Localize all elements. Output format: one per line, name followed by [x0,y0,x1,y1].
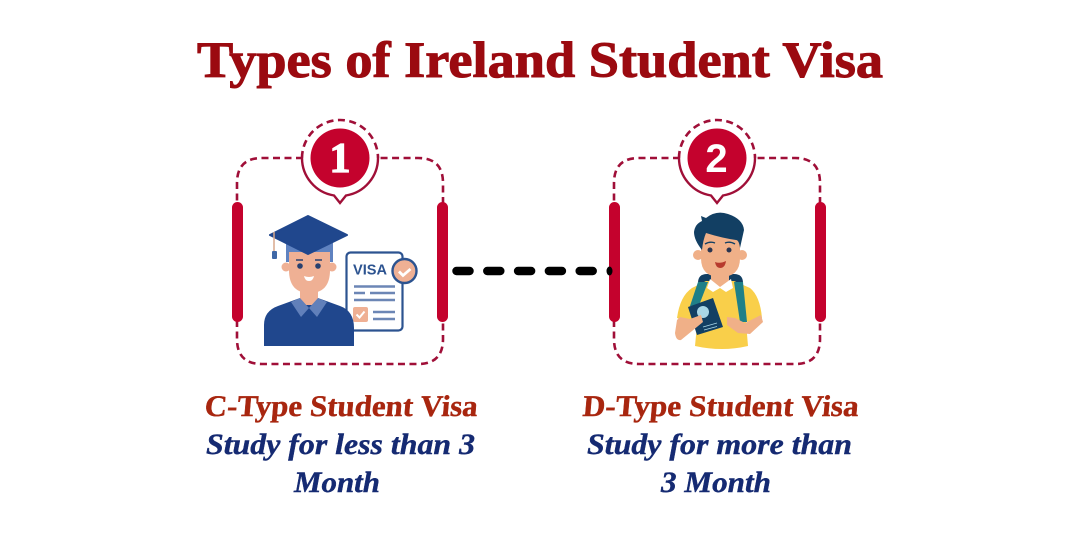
neck [300,285,318,305]
ears [693,250,703,260]
icon: graduate with visa document [264,216,416,346]
number badge 1: 1 [330,136,350,182]
connector: dashed line between cards [456,266,612,276]
panel: D-Type card [609,120,826,364]
number badge 2: 2 [705,137,728,181]
side bar left 2 [609,202,620,322]
icon: student with passport [675,213,763,349]
left hand [675,315,703,340]
visa document: VISA [353,262,388,278]
visa document [346,252,416,330]
collar [707,279,733,292]
text block: D-Type [581,389,860,499]
side bar left 1 [232,202,243,322]
hair [694,213,744,250]
title: Types of Ireland Student Visa [197,33,883,89]
card frame 1 [237,158,443,364]
text block: D-Type: Study for more than [587,428,852,461]
text block: D-Type: D-Type Student Visa [581,389,860,423]
number badge 2 [679,120,755,203]
side bar right 1 [437,202,448,322]
straps [690,282,708,308]
shirt [677,281,762,349]
mortarboard [270,216,347,254]
face [289,252,330,293]
number badge 1 [302,120,378,203]
text block: C-Type: Study for less than 3 [206,428,475,461]
ears [282,262,290,272]
face [701,232,740,277]
passport [688,298,723,335]
eyes and mouth [708,248,712,252]
text block: C-Type [203,389,479,499]
collar [291,298,327,317]
panel: C-Type card [232,120,448,364]
text block: C-Type: C-Type Student Visa [203,389,479,423]
backpack top [698,274,743,290]
gown [264,298,354,346]
text block: C-Type: Month [293,466,380,499]
right arm [727,315,763,334]
card frame 2 [614,158,820,364]
hair back [286,243,333,262]
text block: D-Type: 3 Month [660,466,771,499]
neck [711,268,729,288]
side bar right 2 [815,202,826,322]
